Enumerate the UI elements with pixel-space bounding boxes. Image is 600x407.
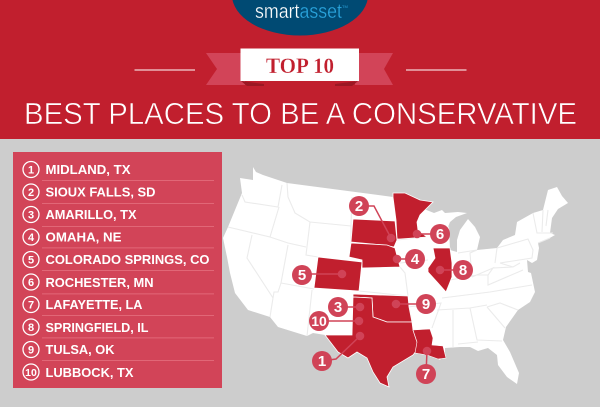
map pin 4 [393,249,425,269]
map pin 6: 6 [436,226,444,243]
state: Texas [325,297,417,387]
header band [0,0,600,139]
row 10: 10 [25,367,37,379]
map pin 4: 4 [411,251,420,268]
row 2: SIOUX FALLS, SD [46,184,156,200]
divider line right [406,70,466,71]
map pin 2 [349,196,395,242]
map pin 8: 8 [459,262,467,279]
state: Illinois [428,248,452,292]
map pin 10 [309,311,363,331]
row 8: SPRINGFIELD, IL [46,320,149,335]
map: United States [223,167,568,387]
map pin 8 [436,260,473,280]
row 4: 4 [28,232,35,244]
row 10: LUBBOCK, TX [46,365,134,380]
state: Louisiana [413,329,446,359]
title: BEST PLACES TO BE A CONSERVATIVE [24,96,577,131]
country outline [223,167,568,387]
map pin 6 [413,224,450,244]
map pin 5: 5 [298,267,306,284]
state: Oklahoma [353,294,412,322]
map pin 1 [312,332,364,371]
map pin 9 [392,294,436,314]
row 1: 1 [28,164,34,176]
row 2: 2 [28,187,34,199]
row 6: ROCHESTER, MN [46,275,154,290]
row 7: LAFAYETTE, LA [46,297,143,312]
row 3: AMARILLO, TX [46,207,137,222]
map pin 7: 7 [422,366,430,383]
divider line left [134,70,195,71]
map pin 2: 2 [355,198,363,215]
row 5: COLORADO SPRINGS, CO [46,252,210,267]
row 8: 8 [28,322,34,334]
map pin 5 [292,265,346,285]
map pin 3 [328,297,364,317]
row 7: 7 [28,300,34,312]
row 9: TULSA, OK [46,342,115,357]
row dividers [42,180,214,361]
row 9: 9 [28,344,34,356]
ribbon: Top 10 [206,48,393,86]
state: Colorado [314,257,362,291]
map pin 7 [416,347,436,384]
state borders [228,183,553,347]
logo badge: smartasset [232,0,368,36]
map pin 1: 1 [318,353,326,370]
row 3: 3 [28,210,34,222]
map pin 10: 10 [311,313,327,329]
list panel [13,152,222,388]
state: South Dakota [351,219,397,247]
logo badge: smartasset: TM [342,4,348,9]
ribbon: Top 10: TOP 10 [266,53,334,78]
row 6: 6 [28,277,34,289]
row 5: 5 [28,254,34,266]
row 1: MIDLAND, TX [46,162,131,177]
map pin 9: 9 [422,296,430,313]
map pin 3: 3 [334,299,342,316]
row 4: OMAHA, NE [46,230,122,244]
state: Nebraska [349,243,400,268]
logo badge: smartasset: smartasset [255,0,342,23]
state: Minnesota [393,193,433,239]
